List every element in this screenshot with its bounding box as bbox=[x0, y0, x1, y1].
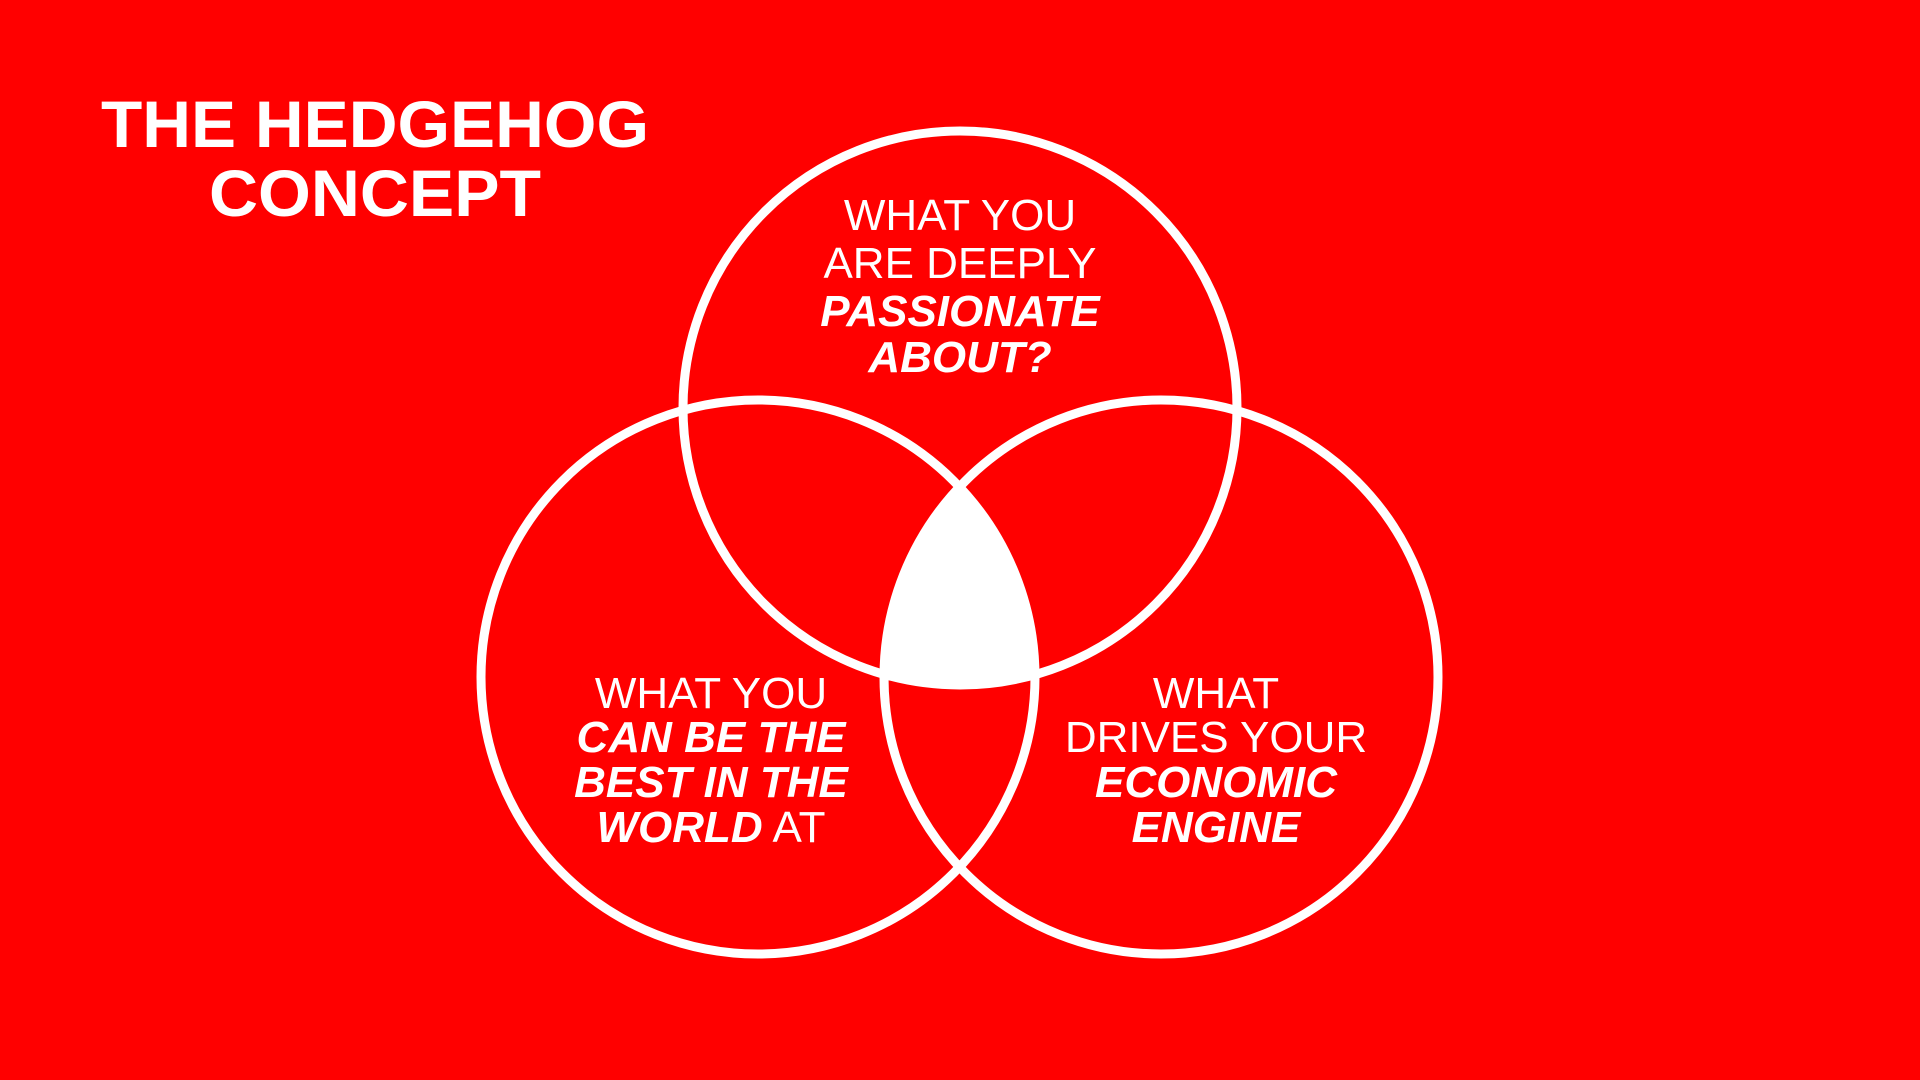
text: economic engine: ENGINE bbox=[1132, 803, 1302, 852]
text: passion bbox=[820, 191, 1101, 382]
text: passion: WHAT YOU bbox=[844, 191, 1076, 240]
text: economic engine: ECONOMIC bbox=[1095, 758, 1338, 807]
circle: best in world bbox=[481, 400, 1035, 954]
text: passion: ABOUT? bbox=[867, 333, 1052, 382]
title: THE HEDGEHOG bbox=[101, 87, 649, 161]
text: economic engine bbox=[1065, 669, 1367, 852]
venn center intersection bbox=[888, 494, 1030, 680]
text: passion: PASSIONATE bbox=[820, 287, 1101, 336]
text: best in world: BEST IN THE bbox=[574, 758, 850, 807]
text: best in world: CAN BE THE bbox=[577, 713, 847, 762]
text: economic engine: WHAT bbox=[1153, 669, 1279, 718]
text: passion: ARE DEEPLY bbox=[823, 239, 1097, 288]
text: economic engine: DRIVES YOUR bbox=[1065, 713, 1367, 762]
text: best in world bbox=[574, 669, 850, 852]
circle: economic engine bbox=[884, 400, 1438, 954]
circle: passion bbox=[683, 131, 1237, 685]
title: CONCEPT bbox=[209, 156, 541, 230]
text: best in world: WORLD AT bbox=[597, 803, 825, 852]
title bbox=[101, 87, 649, 230]
text: best in world: WHAT YOU bbox=[595, 669, 827, 718]
